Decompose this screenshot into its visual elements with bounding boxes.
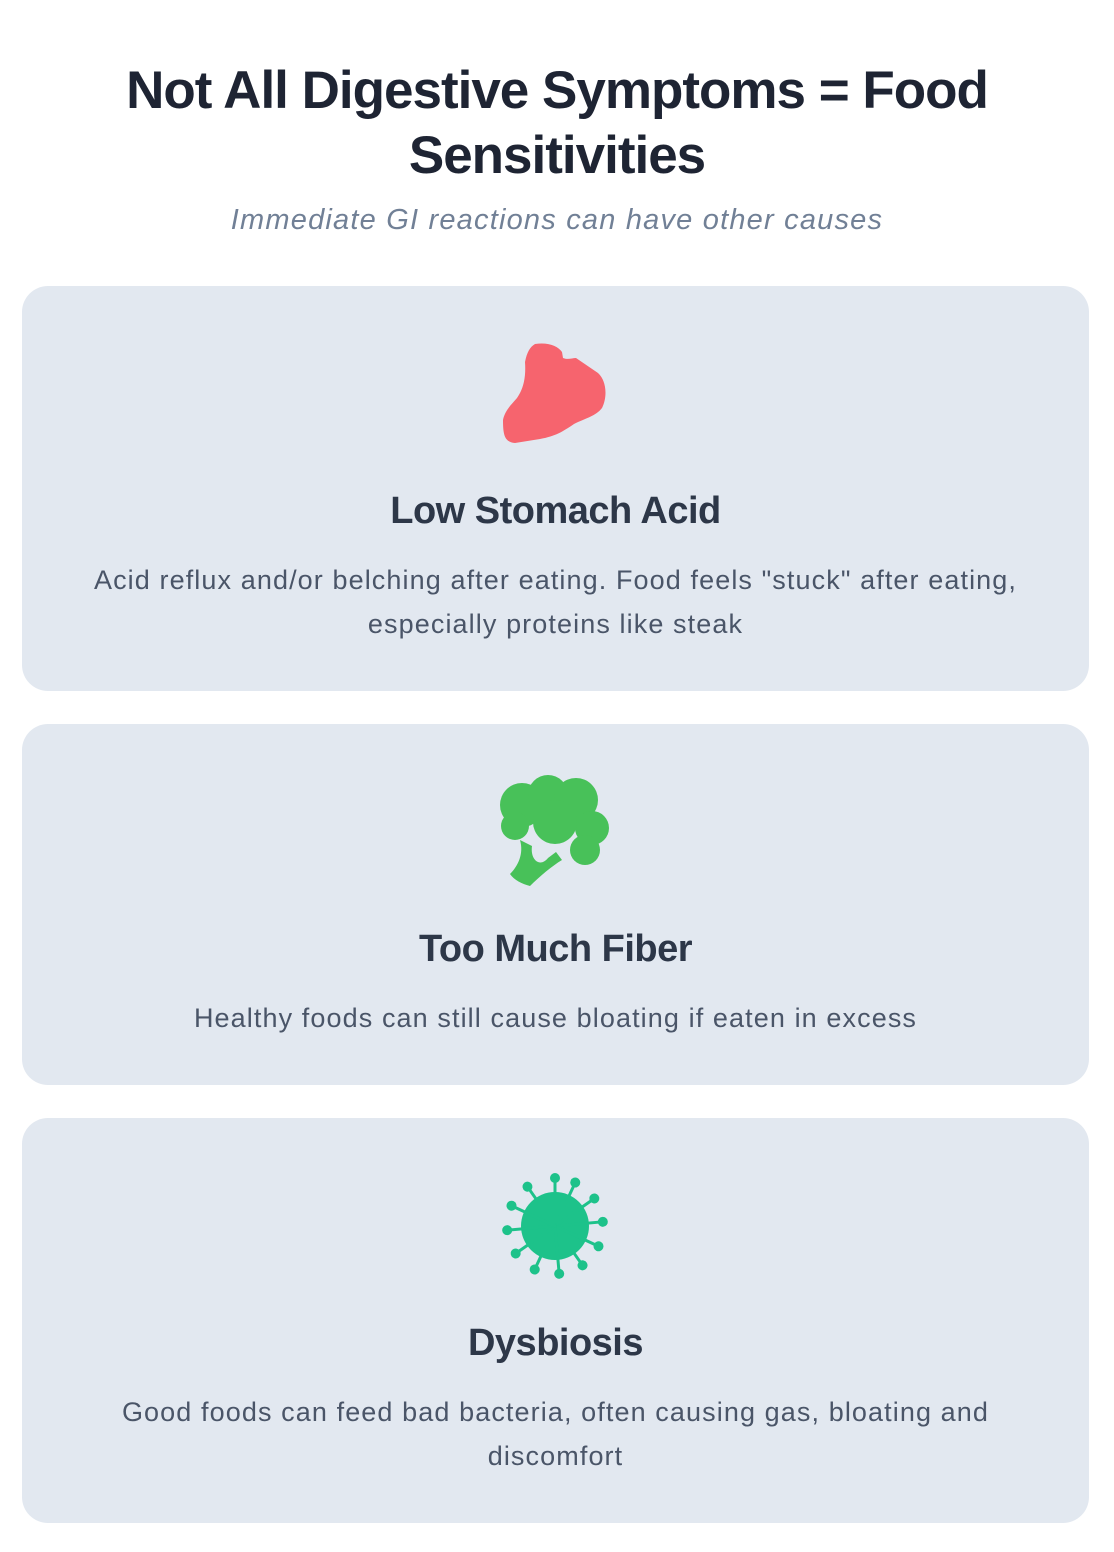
heading: Too Much Fiber [419,928,692,970]
subtitle: Immediate GI reactions can have other causes [231,204,883,236]
icon: virus [502,1173,608,1279]
panel: low stomach acid [22,286,1089,691]
icon: stomach [503,344,606,443]
title [126,61,988,185]
title: Sensitivities [409,126,705,185]
title: Not All Digestive Symptoms = Food [126,61,988,120]
panel: too much fiber [22,724,1089,1085]
panel: dysbiosis [22,1118,1089,1523]
heading: Low Stomach Acid [390,490,721,532]
text: Good foods can feed bad bacteria, often causing gas, bloating and discomfort [122,1397,989,1471]
text: Acid reflux and/or belching after eating. Food feels "stuck" after eating, especially proteins like steak [94,565,1017,639]
text: Healthy foods can still cause bloating if eaten in excess [194,1003,917,1033]
icon: broccoli [500,775,609,886]
heading: Dysbiosis [468,1322,643,1364]
